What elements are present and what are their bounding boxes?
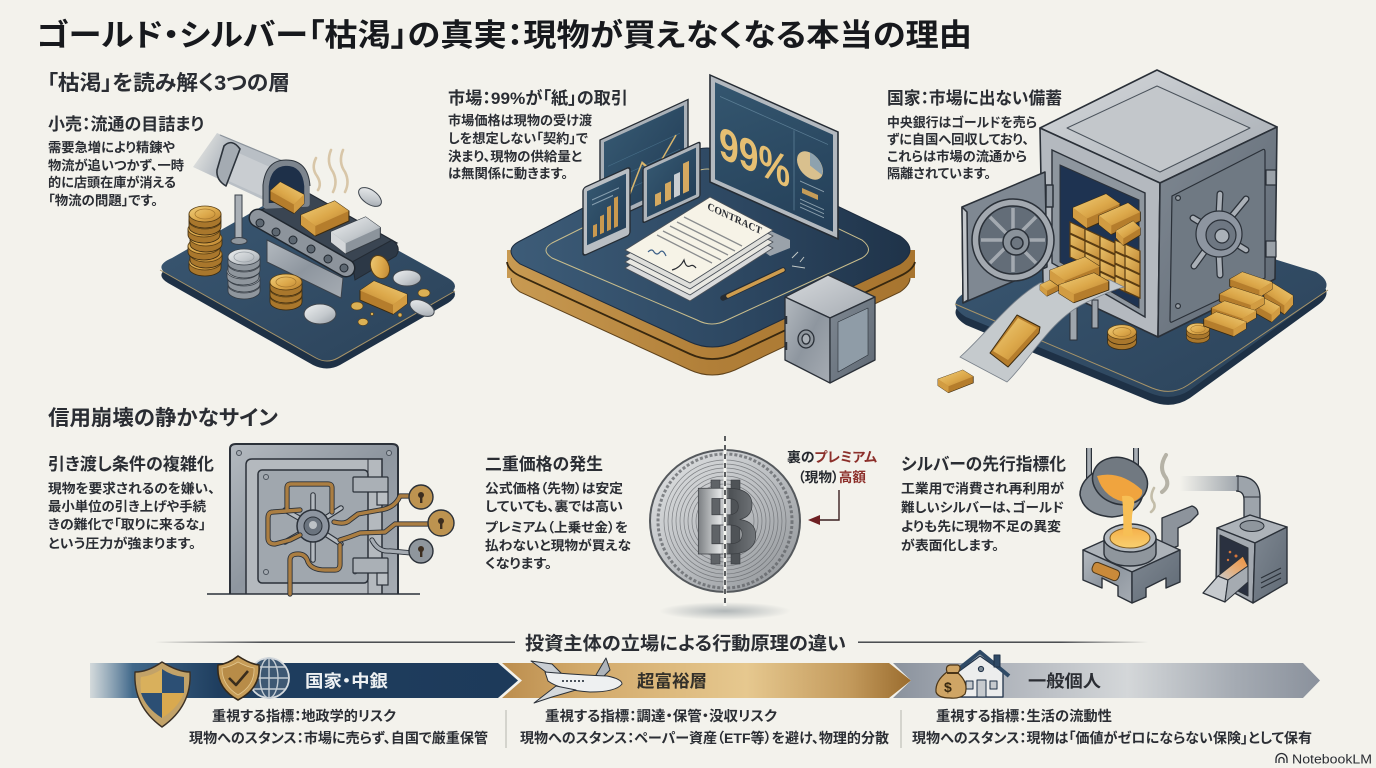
small safe	[785, 275, 875, 383]
navy arrow band	[90, 663, 518, 698]
retail body text: 需要急増により精錬や	[48, 139, 175, 155]
state body text: 中央銀行はゴールドを売ら	[887, 114, 1037, 130]
retail body text: 的に店頭在庫が消える	[48, 174, 176, 190]
state body text: 隔離されています。	[887, 165, 991, 181]
platform	[511, 176, 910, 375]
state body text	[887, 114, 1037, 181]
contract word: CONTRACT	[706, 201, 763, 237]
side box	[1162, 506, 1198, 552]
dual pricing body text: くなります。	[485, 556, 552, 571]
support leg	[235, 195, 242, 240]
panel: general individual band: $	[944, 679, 952, 695]
illustration: split silver coin	[649, 436, 801, 606]
crucible	[1104, 538, 1156, 566]
icon: globe	[249, 658, 289, 698]
bitcoin mark: B	[692, 468, 760, 575]
delivery body text: きの難化で「取りに来るな」	[48, 516, 206, 532]
pipes	[268, 484, 430, 594]
icon: house	[950, 652, 1009, 697]
delivery body text: という圧力が強まります。	[48, 535, 196, 551]
contract stack	[625, 197, 773, 301]
steam	[314, 150, 348, 192]
dual pricing body text: していても、裏では高い	[485, 498, 623, 514]
panel: market layer	[448, 75, 915, 383]
text block: state stance: 現物へのスタンス：市場に売らず、自国で厳重保管	[189, 730, 488, 746]
delivery body text	[48, 480, 215, 551]
NotebookLM credit: NotebookLM	[1292, 752, 1372, 766]
market body text	[448, 112, 592, 181]
hinges	[353, 477, 388, 585]
text block: state stance	[189, 708, 488, 746]
panel: ultra wealthy band	[502, 658, 911, 703]
wheel	[285, 495, 341, 560]
horizontal pipe	[1180, 476, 1260, 525]
title: ゴールド・シルバー「枯渇」の真実：現物が買えなくなる本当の理由	[36, 18, 972, 53]
glowing ingot	[1203, 576, 1228, 602]
back monitor	[600, 100, 688, 225]
silver heading: シルバーの先行指標化	[901, 455, 1066, 474]
market body text: しを想定しない「契約」で	[448, 130, 588, 146]
panel: state and central bank band	[90, 656, 518, 727]
panel: dual pricing	[485, 436, 878, 620]
silver body text: 工業用で消費され再利用が	[901, 480, 1064, 496]
delivery body text: 最小単位の引き上げや手続	[48, 498, 206, 514]
text block: individual stance	[912, 708, 1312, 746]
premium callout: （現物）高額	[798, 469, 866, 485]
section heading: signs: 信用崩壊の静かなサイン	[48, 407, 278, 430]
illustration: smelter pouring molten metal	[1080, 448, 1287, 603]
gold arrow band	[502, 663, 911, 698]
illustration: vault door with tangled pipes and locks	[207, 444, 454, 594]
gold stack in vault	[1070, 194, 1140, 298]
bars on ribbon	[1040, 277, 1064, 296]
pipe mouth	[266, 163, 307, 206]
retail body text: 「物流の問題」です。	[48, 192, 158, 208]
gold pile	[1204, 272, 1293, 336]
panel: silver leading indicator	[901, 448, 1287, 603]
text block: individual stance: 現物へのスタンス：現物は「価値がゼロにならない保険」として保有	[912, 730, 1312, 746]
state body text: ずに自国へ回収しており、	[887, 131, 1029, 147]
illustration: trading desk with monitors and contract	[507, 75, 915, 383]
keyholes	[409, 485, 454, 563]
conveyor support	[267, 240, 343, 298]
safe body	[1040, 70, 1277, 337]
dual pricing body text: プレミアム（上乗せ金）を	[485, 519, 628, 535]
arrow to coin	[808, 490, 839, 525]
silver body text	[901, 480, 1064, 553]
icon: private jet	[531, 658, 622, 703]
pen	[723, 270, 783, 298]
coins	[1108, 330, 1136, 350]
illustration: conveyor with gold and silver on a platform	[160, 133, 455, 368]
text block: state stance: 重視する指標：地政学的リスク	[212, 708, 396, 724]
ribbon	[960, 280, 1124, 382]
loose coins and bar	[304, 304, 336, 324]
molten stream	[1122, 496, 1134, 536]
premium callout: 裏のプレミアム	[787, 449, 878, 465]
front rail with rollers	[258, 218, 346, 268]
small gold stack	[270, 274, 302, 310]
silver coin stack	[227, 249, 260, 299]
door opening	[1052, 150, 1145, 317]
market body text: 決まり、現物の供給量と	[448, 148, 582, 164]
small tablet	[583, 167, 630, 256]
retail body text: 物流が追いつかず、一時	[48, 157, 184, 173]
silver body text: よりも先に現物不足の異変	[901, 518, 1061, 534]
legs	[1070, 300, 1098, 340]
section heading: three layers: 「枯渇」を読み解く3つの層	[47, 72, 290, 95]
dual pricing body text: 公式価格（先物）は安定	[485, 480, 623, 496]
dual pricing body text	[485, 480, 631, 571]
retail heading: 小売：流通の目詰まり	[48, 114, 204, 134]
right door wheel	[1170, 149, 1276, 322]
silver arrow band	[893, 663, 1320, 698]
furnace	[1217, 515, 1287, 543]
delivery body text: 現物を要求されるのを嫌い、	[48, 480, 215, 496]
market body text: は無関係に動きます。	[448, 165, 568, 181]
panel: delivery conditions	[48, 444, 454, 594]
pipe	[193, 133, 285, 202]
panel: state layer	[887, 70, 1328, 405]
band label: 一般個人	[1028, 672, 1101, 691]
shadow under coin	[659, 602, 791, 620]
panel: retail layer	[48, 114, 455, 368]
text block: wealthy stance: 重視する指標：調達・保管・没収リスク	[545, 708, 777, 724]
open door	[962, 172, 1054, 303]
icon: small shield with check	[218, 656, 259, 700]
99 percent headline: 99%	[719, 116, 790, 198]
ladle	[1080, 470, 1142, 517]
panel: general individual band	[893, 652, 1320, 698]
gold coin stack	[188, 206, 222, 276]
band label: 超富裕層	[637, 672, 707, 691]
dual pricing heading: 二重価格の発生	[485, 455, 603, 474]
icon: large shield	[135, 662, 190, 727]
sliding gold bar	[990, 315, 1040, 367]
silver body text: 難しいシルバーは、ゴールド	[901, 499, 1064, 515]
platform	[955, 205, 1328, 405]
belt	[257, 190, 397, 268]
icon: money bag	[936, 665, 966, 698]
silver body text: が表面化します。	[901, 537, 999, 553]
market body text: 市場価格は現物の受け渡	[448, 112, 592, 128]
dual pricing body text: 払わないと現物が買えな	[485, 537, 631, 553]
market heading: 市場：99%が「紙」の取引	[448, 88, 628, 108]
section heading: investors: 投資主体の立場による行動原理の違い	[525, 633, 846, 654]
bars	[270, 182, 304, 214]
state body text: これらは市場の流通から	[887, 148, 1027, 164]
state heading: 国家：市場に出ない備蓄	[887, 88, 1062, 108]
text block: individual stance: 重視する指標：生活の流動性	[936, 708, 1112, 724]
retail body text	[48, 139, 184, 208]
delivery heading: 引き渡し条件の複雑化	[48, 454, 214, 474]
text block: wealthy stance: 現物へのスタンス：ペーパー資産（ETF等）を避け、物理的分散	[520, 730, 889, 746]
steam	[1162, 455, 1167, 492]
tablet	[643, 142, 700, 223]
text block: wealthy stance	[520, 708, 889, 746]
premium callout	[787, 449, 878, 485]
illustration: open vault with gold	[938, 70, 1293, 393]
base	[1083, 528, 1180, 572]
band label: 国家・中銀	[305, 671, 388, 691]
hangers	[1089, 448, 1136, 478]
big monitor	[710, 75, 838, 239]
